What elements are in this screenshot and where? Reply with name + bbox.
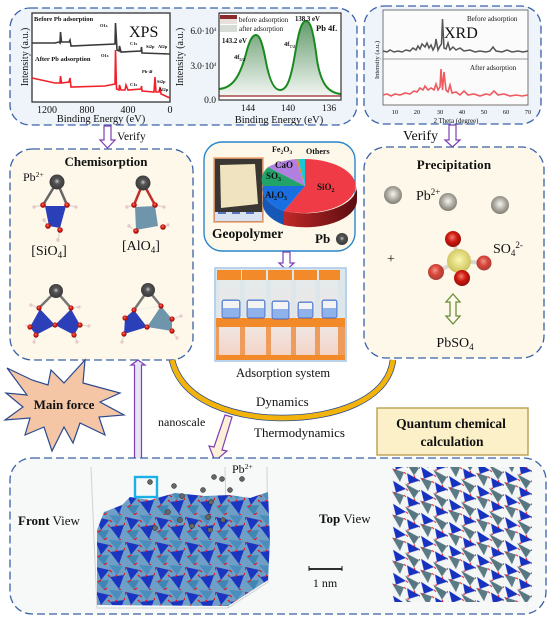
panel: precipitation: PbSO	[436, 336, 469, 351]
chart: Pb 4f spectra	[175, 13, 341, 126]
panel: geopolymer: Geopolymer	[212, 226, 283, 241]
panel: XRD: 2 Theta (degree)	[434, 118, 478, 125]
chart: composition pie: SiO	[317, 182, 332, 192]
chart: Pb 4f spectra: 144	[241, 104, 255, 114]
panel: XRD	[364, 6, 541, 125]
chart: XRD before adsorption trace	[383, 19, 528, 52]
chart: composition pie: 2	[332, 188, 335, 194]
panel: XRD: 20	[414, 109, 420, 116]
caption: adsorption system: Adsorption system	[236, 366, 330, 380]
chart: Pb 4f spectra: 4f	[284, 41, 289, 48]
chart: Pb 4f spectra: before adsorption	[239, 16, 289, 24]
scale bar	[309, 566, 342, 590]
arrow: main force vertical double arrow	[131, 360, 145, 475]
chart: Pb 4f spectra: 4	[214, 63, 217, 68]
panel: precipitation: Precipitation	[417, 157, 492, 172]
arrow: equilibrium	[446, 294, 460, 324]
chart: XPS survey spectra: 0	[168, 105, 172, 116]
chart: XPS survey spectra: After Pb adsorption	[35, 56, 91, 63]
chart: XPS survey spectra: Intensity (a.u.)	[20, 28, 31, 86]
panel: XRD: 30	[437, 109, 443, 116]
panel: XRD: 70	[525, 109, 531, 116]
label: thermodynamics: Thermodynamics	[254, 425, 345, 440]
chart: XPS survey spectra: Al2p	[158, 44, 168, 49]
panel: geopolymer	[204, 142, 357, 251]
panel: chemisorption: ]	[155, 239, 160, 254]
panel: XRD: Before adsorption	[467, 15, 518, 23]
panel: XRD: 50	[481, 109, 487, 116]
panel: precipitation: 4	[511, 248, 516, 258]
panel: geopolymer: Pb	[315, 231, 330, 246]
label: verify left: Verify	[117, 131, 146, 143]
model: front view	[91, 462, 270, 608]
panel: chemisorption	[10, 149, 193, 360]
photo: adsorption system tubes	[215, 268, 346, 361]
chart: XRD after adsorption trace	[383, 69, 528, 96]
label: dynamics: Dynamics	[256, 394, 309, 409]
chart: XPS survey spectra: Al2p	[159, 87, 169, 92]
arc: dynamics arc outline	[172, 360, 393, 418]
chart: composition pie: Others	[306, 147, 330, 156]
arc: dynamics arc fill	[172, 360, 393, 418]
chart: composition pie: 2	[274, 196, 277, 202]
chart: Pb 4f spectra: 3.0·10	[190, 62, 214, 72]
chart: composition pie: 3	[278, 177, 281, 183]
chart: XPS survey spectra: Si2p	[146, 44, 155, 49]
chart: Pb 4f spectra: 7/2	[289, 44, 296, 49]
callout: quantum chemical calculation: calculation	[420, 434, 484, 449]
panel: precipitation: +	[387, 252, 395, 267]
chart: XPS survey spectra: O1s	[101, 53, 109, 58]
arrow: verify right	[445, 125, 460, 147]
label: verify right: Verify	[403, 129, 438, 144]
panel: chemisorption: [SiO	[31, 244, 58, 259]
chart: XPS survey spectra: O1s	[100, 23, 108, 28]
panel: XRD: 10	[392, 109, 398, 116]
chart: composition pie	[262, 145, 357, 227]
chart: XPS survey spectra: Binding Energy (eV)	[57, 114, 146, 125]
chart: composition pie: SO	[266, 171, 278, 181]
chart: Pb 4f spectra: Pb 4f.	[316, 23, 337, 33]
icon: Pb sphere	[336, 233, 348, 245]
panel: chemisorption: ]	[62, 244, 67, 259]
chart: XPS survey spectra: 800	[80, 105, 94, 116]
panel: chemisorption: Chemisorption	[64, 154, 148, 169]
highlight: selected region	[135, 477, 157, 497]
arrow: nanoscale	[209, 415, 232, 461]
chart: Pb 4f spectra: Binding Energy (eV)	[235, 115, 324, 126]
chart: XPS survey spectra: Si2p	[157, 79, 166, 84]
molecule: sulfate	[428, 231, 492, 286]
chart: Pb 4f spectra: 143.2 eV	[222, 38, 247, 45]
chart: Pb 4f spectra: Intensity (a.u.)	[175, 28, 186, 86]
chart: composition pie: O	[277, 190, 284, 200]
panel: chemisorption: 2+	[36, 170, 44, 179]
panel: XRD: XRD	[444, 25, 478, 42]
arrow: verify left	[100, 126, 115, 148]
panel: XRD: Intensity (a.u.)	[374, 41, 381, 79]
molecule: SiO4	[32, 174, 78, 242]
chart: XPS survey spectra: Pb-4f	[142, 69, 153, 74]
panel: precipitation: SO	[493, 242, 511, 257]
panel: precipitation	[364, 147, 544, 358]
panel: precipitation: 2+	[431, 187, 440, 197]
panel: precipitation: 4	[469, 342, 474, 352]
chart: Pb 4f spectra: 4f	[234, 54, 239, 61]
model: front view: Pb	[232, 462, 245, 476]
photo: geopolymer sample	[214, 158, 263, 222]
panel: chemisorption: 4	[58, 250, 63, 260]
panel: chemisorption: [AlO	[122, 239, 151, 254]
panel: XRD: 40	[459, 109, 465, 116]
chart: Pb 4f spectra: 0.0	[204, 96, 216, 106]
chart: composition pie: O	[283, 145, 289, 154]
panel: precipitation: Pb	[416, 189, 431, 204]
chart: composition pie: 2	[280, 150, 283, 156]
arrow: geopolymer to adsorption system	[279, 252, 294, 270]
panel: precipitation: 2-	[515, 240, 523, 250]
callout: quantum chemical calculation	[377, 408, 528, 455]
panel: chemisorption: 4	[151, 245, 156, 255]
chart: Pb 4f spectra: 136	[322, 104, 336, 114]
chart: XPS survey spectra: C1s	[130, 41, 137, 46]
chart: XPS survey spectra: 400	[120, 105, 136, 116]
chart: Pb 4f spectra: 5/2	[239, 57, 246, 62]
chart: Pb 4f spectra: 138.3 eV	[295, 16, 320, 23]
chart: composition pie: Al	[265, 190, 274, 200]
label: nanoscale: nanoscale	[158, 415, 205, 429]
chart: XPS survey spectra	[20, 13, 172, 125]
panel: nanoscale models: Front View	[18, 513, 81, 528]
model: top view	[392, 467, 532, 602]
chart: Pb 4f spectra: 6.0·10	[190, 27, 214, 37]
panel: XRD: After adsorption	[470, 64, 517, 72]
chart: XPS survey spectra: Before Pb adsorption	[34, 16, 93, 23]
molecule: Si-O-Al dimer	[120, 283, 183, 344]
chart: composition pie: Fe	[272, 145, 280, 154]
molecule: AlO4	[125, 176, 170, 234]
chart: XPS survey spectra: 1200	[37, 105, 57, 116]
model: front view: 2+	[245, 462, 253, 471]
scale bar: 1 nm	[313, 576, 338, 590]
panel: XPS	[10, 8, 357, 126]
panel: XRD: 60	[503, 109, 509, 116]
panel: nanoscale models: Top View	[319, 511, 371, 526]
callout: quantum chemical calculation: Quantum chemical	[396, 416, 506, 431]
chart: XPS survey spectra: C1s	[130, 82, 137, 87]
callout: main force: Main force	[34, 397, 95, 412]
molecule: Si-O-Si dimer	[25, 284, 91, 344]
chart: Pb 4f spectra: after adsorption	[239, 25, 284, 33]
panel: chemisorption: Pb	[23, 170, 36, 184]
chart: composition pie: CaO	[275, 160, 293, 170]
chart: Pb 4f spectra: 140	[281, 104, 295, 114]
callout: main force	[5, 360, 124, 451]
chart: Pb 4f spectra: 4	[214, 28, 217, 33]
chart: composition pie: 3	[284, 196, 287, 202]
panel: nanoscale models	[10, 458, 546, 614]
chart: XPS survey spectra: XPS	[129, 24, 158, 41]
chart: composition pie: 3	[289, 150, 292, 156]
